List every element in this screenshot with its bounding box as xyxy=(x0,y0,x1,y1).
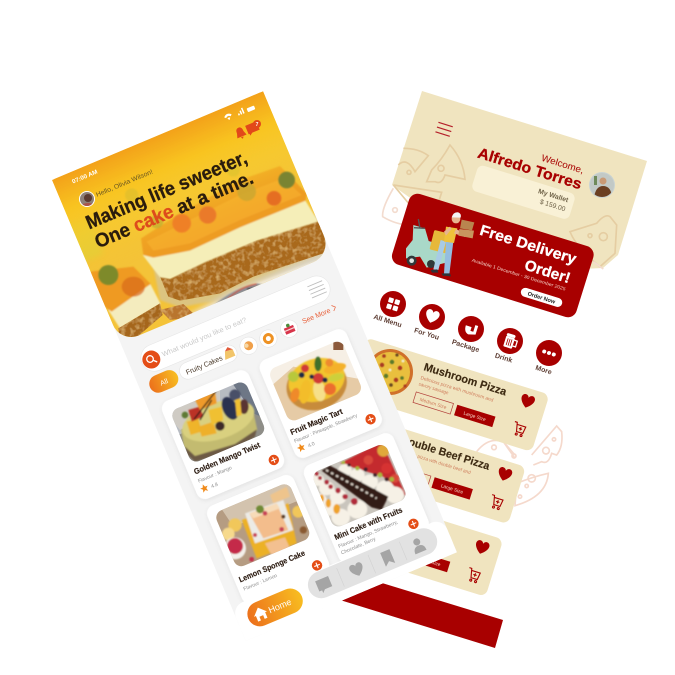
card text group xyxy=(237,544,324,600)
message icon with badge: 7 xyxy=(256,122,259,128)
wallet card: $ 159.00 xyxy=(539,199,566,213)
food card: mushroom pizza: Mushroom Pizza xyxy=(422,361,509,399)
time: 07:00 AM xyxy=(71,169,99,185)
product card: mini cake with fruits xyxy=(301,430,432,566)
menu icon: package: Package xyxy=(451,339,480,354)
card text group: Fruit Magic Tart xyxy=(289,407,344,437)
see more link: See More xyxy=(301,306,332,326)
left app screen xyxy=(52,91,457,641)
fruity cakes tab: Fruity Cakes xyxy=(184,353,224,377)
search button xyxy=(140,348,163,371)
menu icon: for you xyxy=(413,304,445,342)
order now button: Order Now xyxy=(527,291,556,306)
grey screen panel xyxy=(110,230,457,641)
large cake xyxy=(153,215,337,307)
product card: lemon sponge cake xyxy=(204,472,332,606)
category circle: strawberry cake xyxy=(278,317,301,340)
food card: double beef pizza: Double Beef Pizza xyxy=(400,434,492,473)
menu icon: package xyxy=(451,316,484,354)
hero photo: cakes xyxy=(52,91,357,353)
yellow haze over the top of the photo xyxy=(52,91,298,262)
category row xyxy=(146,301,340,396)
food card: double beef pizza: Delicious pizza with double beef and xyxy=(397,448,472,476)
photo: mango cake xyxy=(172,382,264,462)
greeting text: Hello, Olivia Wilson! xyxy=(95,169,154,199)
category circle: cake slice xyxy=(237,334,260,357)
pizza watermark pattern: header xyxy=(383,145,617,269)
card text group xyxy=(333,501,420,559)
card text group: 4.8 xyxy=(210,482,219,490)
pizza watermark pattern: lower right xyxy=(477,426,562,506)
banner text xyxy=(470,222,579,292)
all tab xyxy=(146,367,181,396)
food card: mushroom pizza: Delicious pizza with mushroom and xyxy=(420,375,494,404)
status bar icons xyxy=(223,103,255,122)
wallet card xyxy=(471,164,576,220)
banner text: Available 1 December - 30 December 2025 xyxy=(471,258,567,292)
home button xyxy=(243,585,307,630)
all tab: All xyxy=(159,378,170,388)
nav icon: heart xyxy=(348,561,366,578)
hamburger menu icon xyxy=(435,122,453,136)
menu icon: more: More xyxy=(534,365,553,376)
greeting: Welcome, xyxy=(540,153,585,176)
fruit toppings xyxy=(98,265,118,285)
search bar: What would you like to eat? xyxy=(161,317,248,359)
search bar xyxy=(137,272,334,375)
menu icon: all menu xyxy=(372,291,406,329)
food card: mushroom pizza xyxy=(348,338,549,452)
bell icon xyxy=(234,126,248,141)
card text group: Mini Cake with Fruits xyxy=(333,505,404,542)
menu icon: drink xyxy=(494,328,523,365)
food card: double beef pizza: sausage xyxy=(395,455,414,465)
menu icon: for you: For You xyxy=(413,327,440,342)
food card: mushroom pizza: Medium Size xyxy=(419,397,447,411)
message icon with badge xyxy=(245,120,261,136)
photo: lemon cake xyxy=(216,484,310,566)
product card: fruit magic tart xyxy=(257,326,385,461)
nav icon: chat xyxy=(315,576,333,594)
category circle: donut xyxy=(257,327,280,350)
profile avatar xyxy=(589,172,615,198)
banner text: Order! xyxy=(522,257,572,287)
pizza image xyxy=(374,349,413,395)
right app screen xyxy=(342,91,647,648)
greeting: Alfredo Torres xyxy=(476,145,584,193)
food card: mushroom pizza: Large Size xyxy=(463,411,487,423)
food card: third pizza xyxy=(303,483,503,597)
order now button xyxy=(520,287,563,308)
card text group: Flavour : Lemon xyxy=(243,573,278,592)
card text group: Flavour : Mango xyxy=(197,465,233,485)
card text group: Chocolate, Berry xyxy=(340,536,377,556)
home button: Home xyxy=(267,597,293,615)
promo banner xyxy=(390,191,596,320)
headline: Making life sweeter, xyxy=(82,147,250,234)
banner text: Free Delivery xyxy=(478,222,579,268)
card text group xyxy=(192,436,281,495)
filter icon xyxy=(307,281,327,298)
hero text group xyxy=(69,114,259,253)
photo: mini cakes xyxy=(314,445,406,526)
wallet card: My Wallet xyxy=(537,188,570,204)
product card: golden mango twist xyxy=(159,368,287,502)
bottom navigation bar xyxy=(231,518,457,641)
food card: mushroom pizza: savory sausage xyxy=(418,381,449,396)
menu icon: all menu: All Menu xyxy=(372,314,402,329)
small cake xyxy=(108,283,161,328)
hero text group: One cake at a time. xyxy=(92,167,257,253)
card text group xyxy=(289,396,377,455)
cream header panel xyxy=(392,91,647,270)
fruity cakes tab xyxy=(177,343,240,382)
red bottom bar xyxy=(340,583,503,648)
nav pill xyxy=(304,524,441,602)
food card: third pizza: Large Size xyxy=(417,556,441,568)
card text group: Flavour : Pineapple, Strawberry xyxy=(293,413,359,445)
menu icon: more xyxy=(534,340,562,376)
nav icon: person xyxy=(410,536,427,554)
user avatar xyxy=(79,191,95,207)
menu icon: drink: Drink xyxy=(494,353,513,365)
card text group: Flavour : Mango, Strawberry, xyxy=(337,519,399,550)
card text group: Lemon Sponge Cake xyxy=(237,548,307,584)
photo: fruit tart xyxy=(270,342,361,420)
food card: double beef pizza xyxy=(326,410,526,524)
scooter delivery illustration xyxy=(406,212,474,276)
food card: double beef pizza: Large Size xyxy=(440,483,464,496)
card text group: 4.0 xyxy=(307,441,316,449)
nav icon: bookmark xyxy=(380,549,395,567)
card text group: Golden Mango Twist xyxy=(193,440,262,476)
